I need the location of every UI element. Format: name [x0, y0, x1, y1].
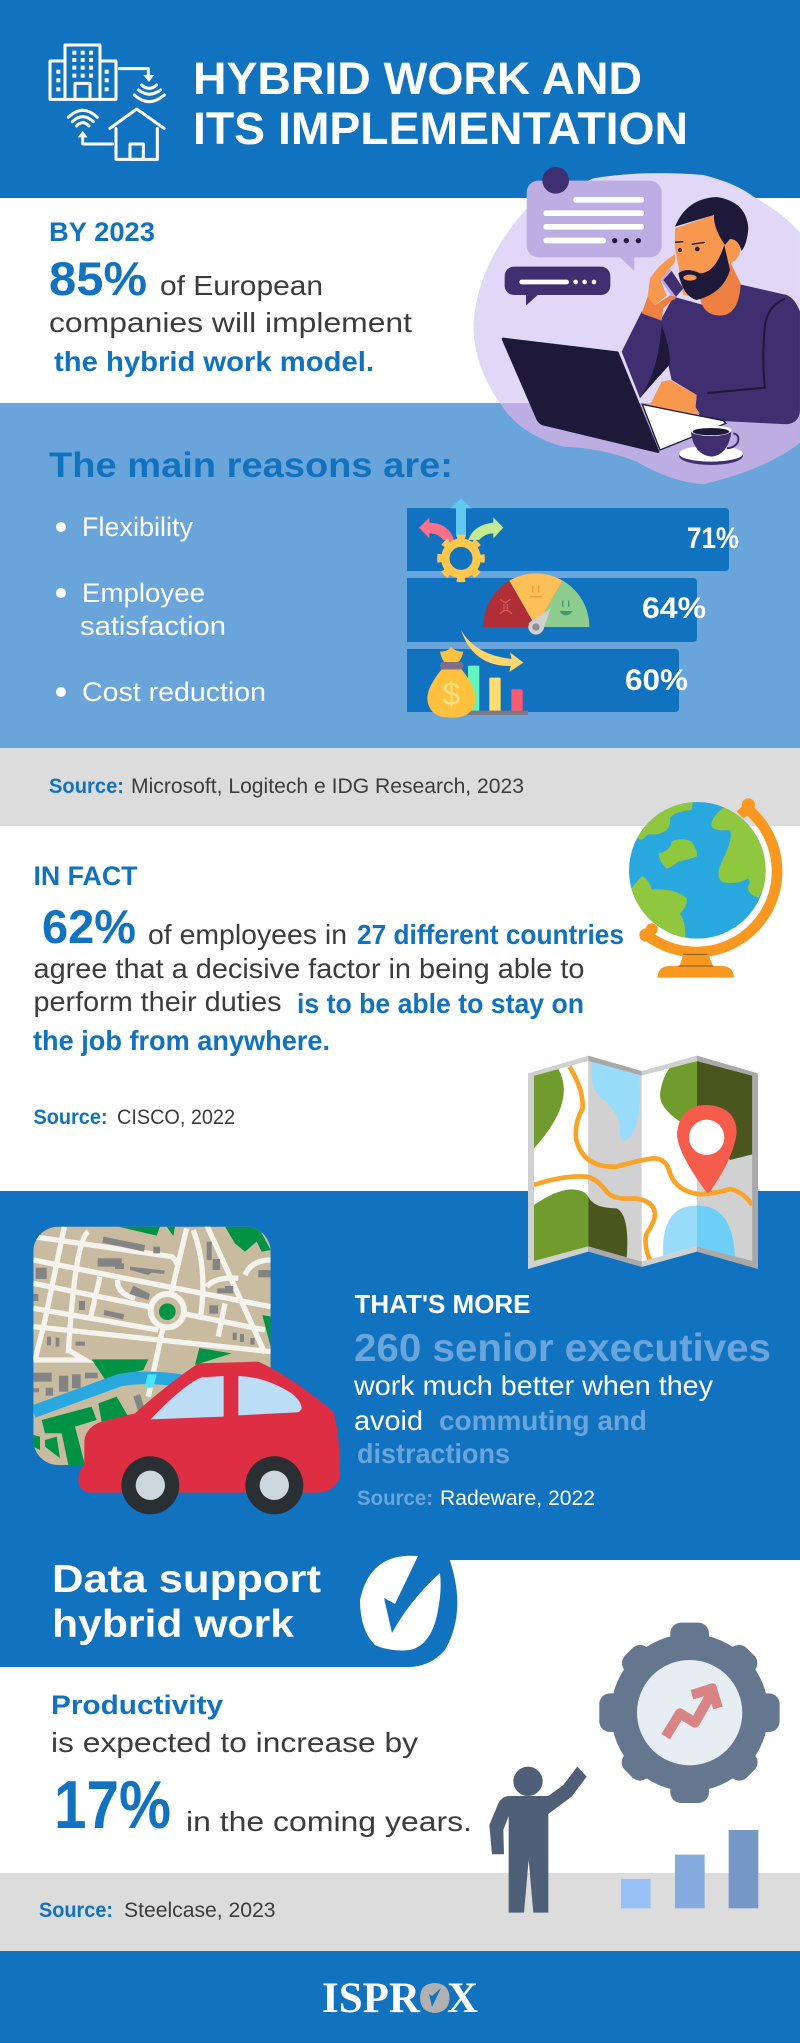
source line two: CISCO, 2022 — [117, 1106, 235, 1129]
chart: growth bars — [621, 1830, 758, 1908]
panel: more executives band — [0, 1191, 800, 1560]
text block: 260 senior executives: distractions — [357, 1438, 510, 1469]
text block: 260 senior executives: work much better when they — [353, 1370, 713, 1401]
panel: data support heading banner — [0, 1555, 457, 1667]
illustration: person pointing at gear — [489, 1767, 587, 1913]
icon: gear with three arrows — [419, 498, 503, 579]
panel: footer band — [0, 1951, 800, 2043]
text block: 62 percent statistic: is to be able to stay on — [297, 988, 584, 1019]
illustration: man on phone at laptop — [473, 167, 800, 484]
list: reasons: satisfaction — [80, 611, 226, 641]
list: reasons: Employee — [82, 578, 205, 608]
heading: the main reasons are: The main reasons are: — [49, 446, 453, 485]
list: reasons — [56, 512, 266, 707]
panel: main reasons band — [0, 403, 800, 748]
text block: productivity statistic: 17% — [54, 1767, 171, 1843]
icon: check mark badge — [360, 1556, 441, 1650]
text block: 260 senior executives — [353, 1289, 771, 1469]
source line four: Source: — [39, 1899, 113, 1922]
illustration: red car in front of city map — [33, 1225, 340, 1514]
title — [193, 53, 688, 154]
text block: 260 senior executives: 260 senior executives — [354, 1327, 771, 1370]
heading: data support hybrid work — [52, 1558, 321, 1646]
text block: 85 percent statistic: BY 2023 — [49, 217, 155, 247]
text block: productivity statistic: in the coming years. — [186, 1806, 472, 1837]
panel: header band — [0, 0, 800, 198]
logo: ISPROX: ISPR — [322, 1975, 421, 2022]
source line three: Radeware, 2022 — [440, 1487, 595, 1510]
text block: 62 percent statistic: the job from anywhere. — [33, 1025, 330, 1056]
text block: 85 percent statistic: the hybrid work model. — [54, 346, 374, 377]
text block: 260 senior executives: avoid — [354, 1405, 423, 1436]
city street map — [33, 1225, 271, 1465]
red car — [78, 1362, 340, 1514]
source line three: Source: — [357, 1487, 433, 1510]
title: ITS IMPLEMENTATION — [193, 103, 688, 154]
value: 60%: 60% — [625, 664, 688, 697]
source line four — [39, 1899, 276, 1922]
lavender blob behind the man — [473, 173, 800, 484]
open notebook under laptop — [642, 404, 726, 450]
text block: 62 percent statistic: 27 different countries — [357, 919, 624, 950]
bar: cost reduction 60% — [407, 649, 679, 712]
value: 71%: 71% — [687, 522, 739, 555]
man figure — [622, 197, 800, 424]
logo: ISPROX: X — [447, 1975, 478, 2022]
text block: productivity statistic: Productivity — [51, 1690, 223, 1720]
source line three — [357, 1487, 595, 1510]
text block: productivity statistic — [51, 1690, 472, 1843]
list: reasons: Cost reduction — [82, 677, 266, 707]
source line one: Source: — [49, 775, 124, 798]
icon: money bag and falling cost chart — [427, 630, 528, 718]
text block: 85 percent statistic — [49, 217, 412, 377]
source line two — [34, 1106, 235, 1129]
text block: 85 percent statistic: of European — [160, 270, 323, 301]
title: HYBRID WORK AND — [193, 53, 642, 104]
source line two: Source: — [34, 1106, 108, 1129]
logo: ISPROX — [322, 1975, 478, 2022]
text block: 85 percent statistic: 85% — [49, 252, 147, 305]
icon: money bag and falling cost chart: $ — [442, 676, 460, 712]
source line one: Microsoft, Logitech e IDG Research, 2023 — [131, 775, 524, 798]
text block: 62 percent statistic: perform their duties — [34, 986, 282, 1017]
text block: 85 percent statistic: companies will implement — [49, 307, 412, 338]
text block: 62 percent statistic: agree that a decisive factor in being able to — [34, 953, 584, 984]
icon: globe on stand — [629, 798, 777, 978]
text block: 62 percent statistic — [33, 861, 624, 1056]
small speech bubble — [505, 267, 610, 306]
text block: productivity statistic: is expected to increase by — [51, 1727, 418, 1758]
text block: 62 percent statistic: 62% — [42, 900, 136, 953]
heading: data support hybrid work: hybrid work — [52, 1603, 294, 1646]
laptop — [503, 339, 658, 452]
text block: 62 percent statistic: of employees in — [148, 919, 347, 950]
panel: source strip two — [0, 1873, 800, 1951]
panel: source strip one — [0, 748, 800, 826]
text block: 260 senior executives: commuting and — [439, 1405, 647, 1436]
illustration: gear with growth arrow — [599, 1623, 780, 1803]
value: 64%: 64% — [642, 592, 706, 625]
bar: flexibility 71% — [407, 508, 729, 571]
list: reasons: Flexibility — [82, 512, 193, 542]
bar: employee satisfaction 64% — [407, 578, 697, 642]
bar chart: reasons percentages — [407, 508, 739, 712]
icon: satisfaction gauge — [483, 573, 589, 635]
heading: data support hybrid work: Data support — [52, 1558, 321, 1601]
logo: ISPROX: O — [418, 1975, 451, 2022]
large speech bubble — [527, 167, 662, 271]
icon: office and home connected by wifi — [50, 45, 164, 159]
text block: 62 percent statistic: IN FACT — [34, 861, 138, 891]
icon: folded map with location pin — [528, 1056, 758, 1269]
coffee cup on saucer — [679, 425, 743, 465]
text block: 260 senior executives: THAT'S MORE — [354, 1289, 530, 1319]
source line four: Steelcase, 2023 — [124, 1899, 276, 1922]
